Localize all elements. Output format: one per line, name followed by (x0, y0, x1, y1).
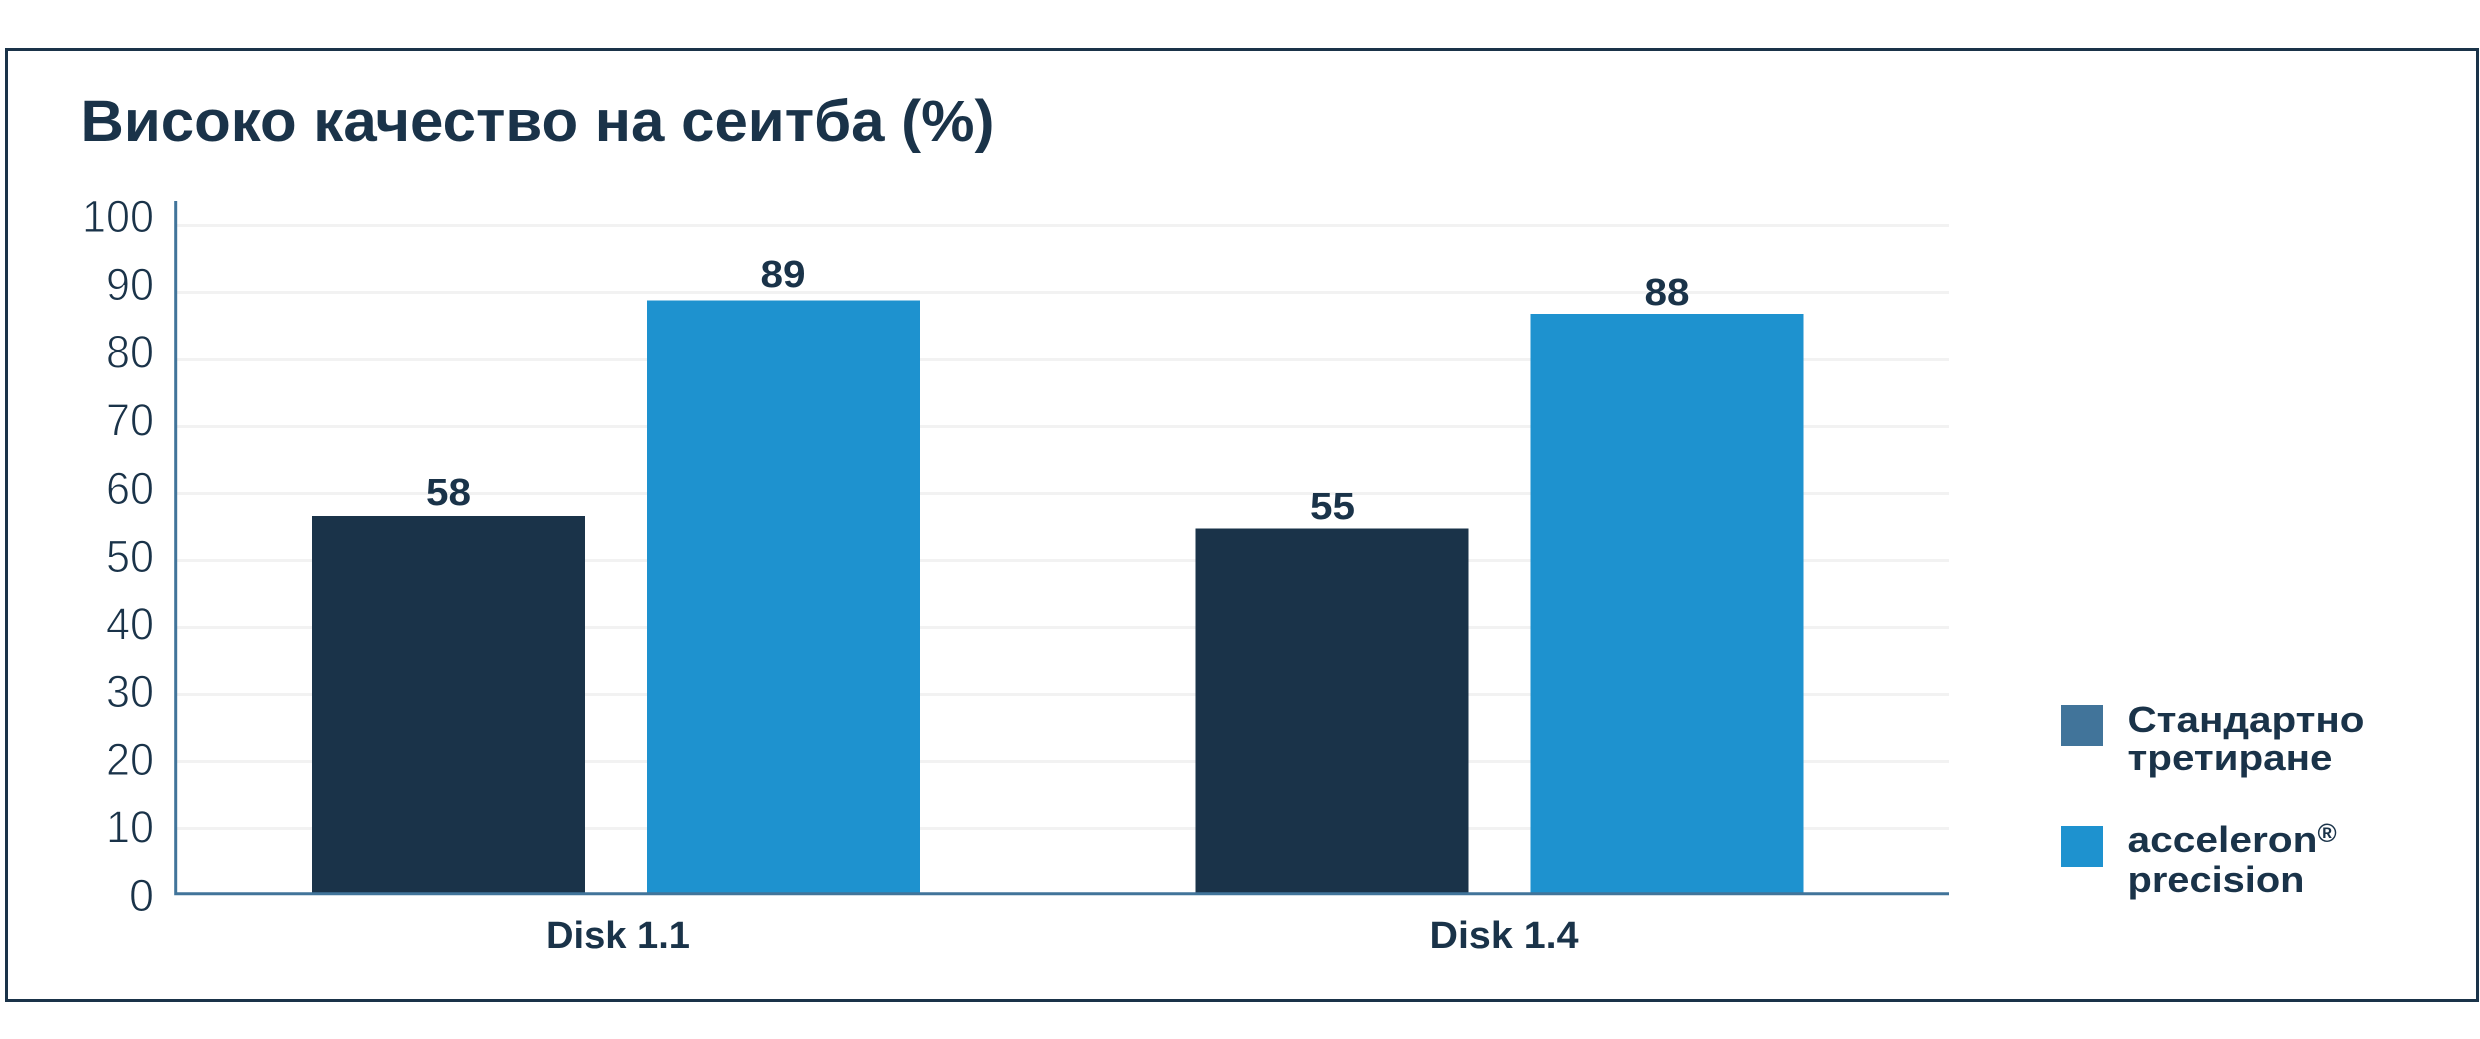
value label 89: 89 (760, 254, 806, 296)
y axis labels (82, 191, 154, 921)
y axis labels: 0 (129, 870, 154, 921)
axes (176, 201, 1949, 894)
bar: Disk 1.1 standard 58 (312, 516, 585, 894)
y axis labels: 100 (82, 191, 154, 242)
value label 88: 88 (1644, 272, 1690, 314)
y axis labels: 90 (106, 259, 154, 310)
legend item: acceleron precision: precision (2128, 859, 2304, 900)
value label 58: 58 (426, 472, 471, 514)
bar: Disk 1.1 acceleron 89 (647, 300, 920, 894)
y axis labels: 20 (106, 734, 154, 785)
y axis labels: 60 (106, 463, 154, 514)
legend item: acceleron precision (2061, 818, 2337, 900)
legend item: standard treatment: третиране (2128, 737, 2332, 778)
y axis labels: 10 (106, 802, 154, 852)
y axis labels: 40 (106, 598, 154, 650)
legend (2061, 699, 2364, 900)
bar chart (82, 191, 1949, 957)
value label 55: 55 (1310, 486, 1355, 528)
legend item: acceleron precision: ® (2318, 818, 2337, 848)
bar: Disk 1.4 acceleron 88 (1530, 314, 1804, 894)
y axis labels: 80 (106, 326, 154, 378)
legend item: standard treatment (2061, 699, 2364, 778)
y axis labels: 50 (106, 531, 154, 582)
legend item: acceleron precision: acceleron (2128, 819, 2318, 860)
y axis labels: 70 (106, 395, 154, 446)
title: Високо качество на сеитба (%) (80, 89, 994, 154)
category label Disk 1.1: Disk 1.1 (546, 915, 690, 957)
bar: Disk 1.4 standard 55 (1196, 528, 1468, 894)
legend item: standard treatment: Стандартно (2128, 699, 2364, 740)
y axis labels: 30 (106, 666, 154, 717)
category label Disk 1.4: Disk 1.4 (1430, 915, 1578, 957)
